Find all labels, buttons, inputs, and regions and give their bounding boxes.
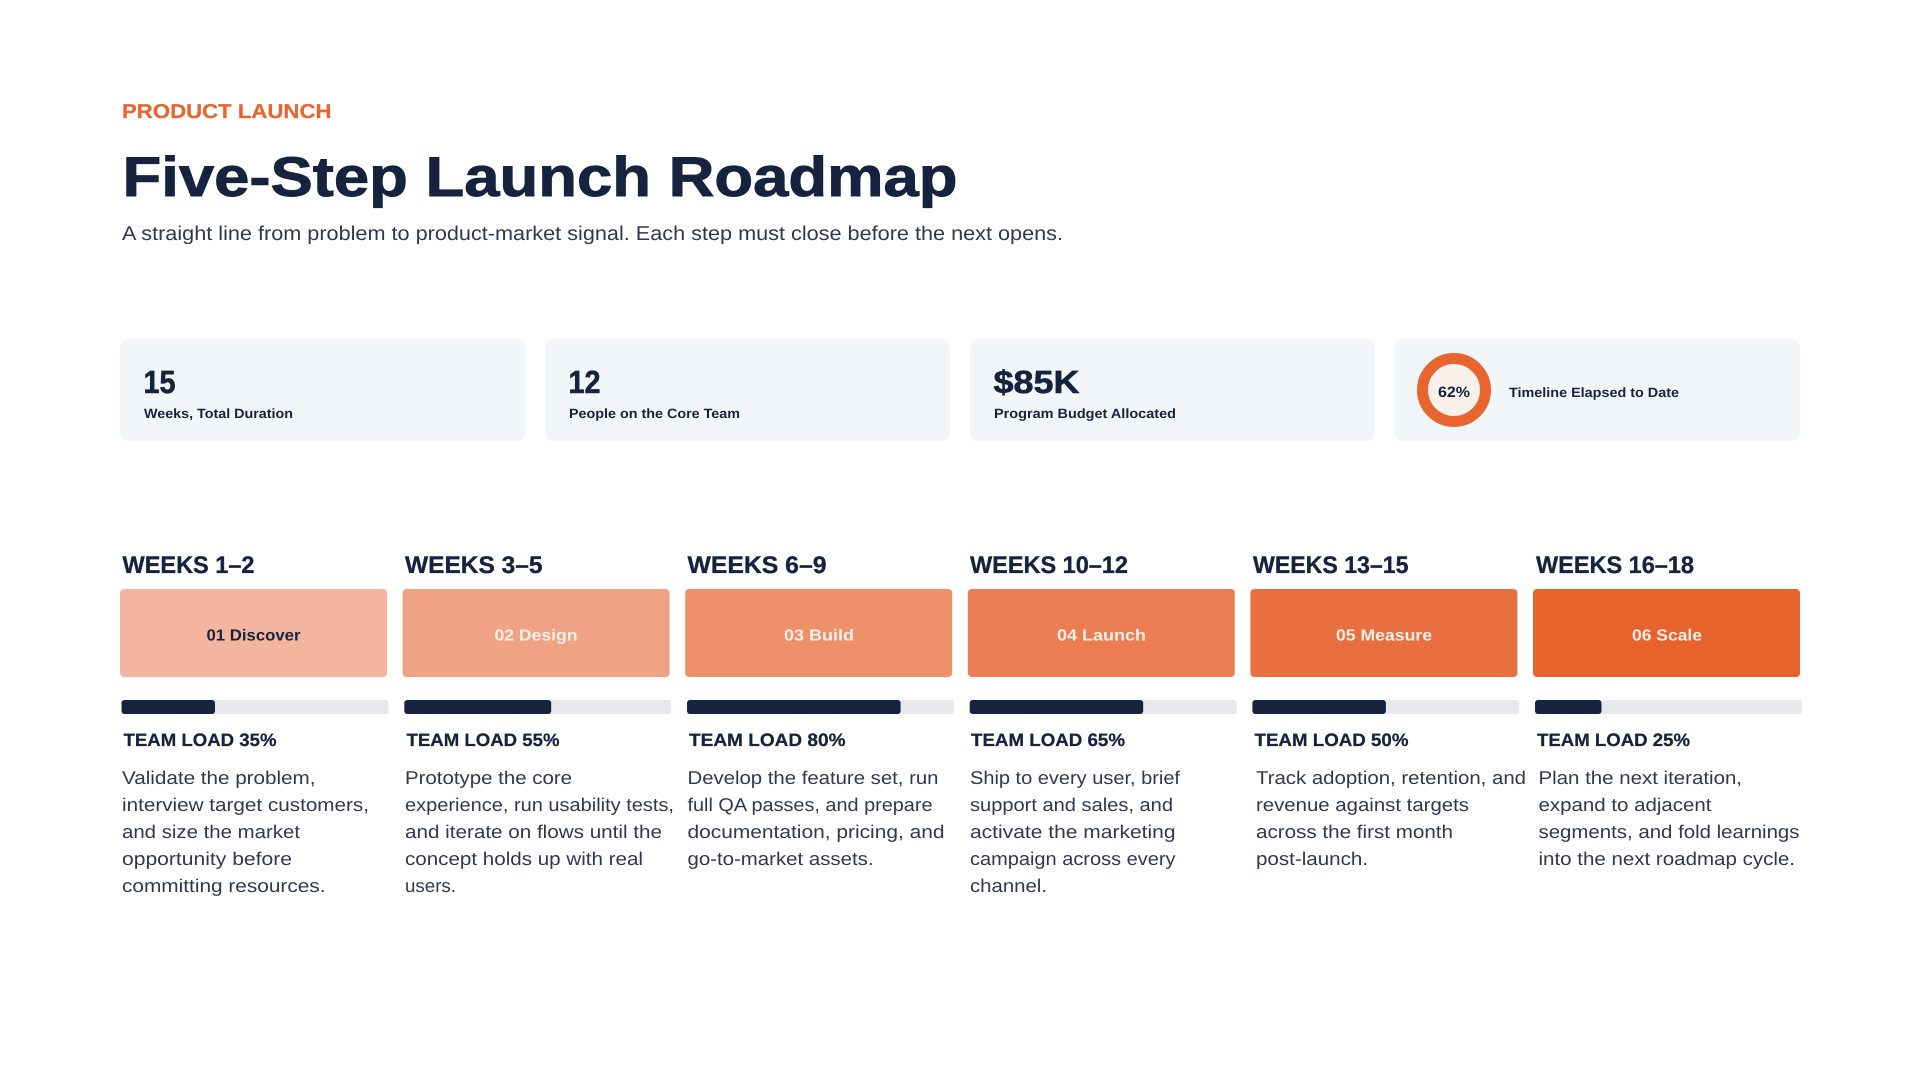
panel: step 05 measure (1250, 552, 1526, 869)
donut gauge: 62%: 62% (1438, 384, 1470, 401)
panel: step 02 design: TEAM LOAD 55% (406, 730, 560, 750)
description: revenue against targets (1256, 794, 1469, 815)
description: segments, and fold learnings (1538, 821, 1800, 842)
description: campaign across every (970, 848, 1176, 869)
stat card: 12 people: People on the Core Team (569, 406, 740, 421)
description: interview target customers, (122, 794, 369, 815)
eyebrow: product launch: PRODUCT LAUNCH (122, 101, 332, 123)
step box: 01 Discover: 01 Discover (206, 628, 300, 644)
description: documentation, pricing, and (688, 821, 944, 842)
stat card: 12 people: 12 (568, 364, 600, 400)
description (970, 767, 1181, 896)
step box: 02 Design: 02 Design (494, 628, 578, 644)
panel: stat cards (120, 339, 1800, 441)
panel: step 03 build (685, 552, 954, 869)
stat card: 15 weeks (120, 339, 525, 441)
panel: step 04 launch: TEAM LOAD 65% (971, 730, 1125, 750)
description: committing resources. (122, 875, 326, 896)
stat card: 15 weeks: 15 (144, 364, 176, 400)
panel: step 01 discover (120, 552, 388, 896)
progress bar: 25% (1535, 700, 1802, 714)
description: and size the market (122, 821, 300, 842)
description: across the first month (1256, 821, 1453, 842)
description: users. (405, 875, 456, 896)
stat card: 12 people (545, 339, 950, 441)
step box: 04 Launch: 04 Launch (1057, 628, 1146, 644)
step box: 05 Measure (1250, 589, 1517, 677)
description: Prototype the core (405, 767, 572, 788)
panel: step 04 launch: WEEKS 10–12 (970, 552, 1128, 579)
description: support and sales, and (970, 794, 1173, 815)
description: Validate the problem, (122, 767, 316, 788)
gauge label: Timeline Elapsed to Date (1509, 385, 1680, 400)
donut gauge: 62% (1422, 358, 1486, 422)
description: concept holds up with real (405, 848, 643, 869)
description: full QA passes, and prepare (688, 794, 932, 815)
title: Five-Step Launch Roadmap (122, 145, 957, 208)
stat card: 15 weeks: Weeks, Total Duration (144, 406, 293, 421)
description: go-to-market assets. (688, 848, 874, 869)
description: into the next roadmap cycle. (1538, 848, 1795, 869)
step box: 04 Launch (968, 589, 1235, 677)
description: and iterate on flows until the (405, 821, 662, 842)
panel: step 03 build: WEEKS 6–9 (688, 552, 826, 579)
description: Plan the next iteration, (1538, 767, 1742, 788)
description (122, 767, 369, 896)
step box: 03 Build (685, 589, 952, 677)
progress bar: 65% (970, 700, 1237, 714)
subtitle: A straight line from problem to product-market signal. Each step must close before the next opens. (122, 223, 1063, 245)
description (1538, 767, 1800, 869)
description (1256, 767, 1526, 869)
step box: 03 Build: 03 Build (784, 628, 854, 644)
description: channel. (970, 875, 1047, 896)
description: opportunity before (122, 848, 292, 869)
stat card: timeline elapsed (1395, 339, 1800, 441)
panel: step 06 scale (1533, 552, 1802, 869)
panel: step 05 measure: TEAM LOAD 50% (1254, 730, 1408, 750)
progress bar: 55% (404, 700, 671, 714)
panel: step 03 build: TEAM LOAD 80% (689, 730, 846, 750)
description: Ship to every user, brief (970, 767, 1181, 788)
panel: step 01 discover: TEAM LOAD 35% (124, 730, 276, 750)
panel: step 06 scale: WEEKS 16–18 (1536, 552, 1694, 579)
panel: step 01 discover: WEEKS 1–2 (122, 552, 254, 579)
step box: 01 Discover (120, 589, 387, 677)
description (405, 767, 674, 896)
stat card: budget: Program Budget Allocated (994, 406, 1176, 421)
description: experience, run usability tests, (405, 794, 674, 815)
description: activate the marketing (970, 821, 1176, 842)
stat card: budget: $85K (994, 364, 1080, 400)
step box: 06 Scale (1533, 589, 1800, 677)
description: Track adoption, retention, and (1256, 767, 1526, 788)
panel: step 02 design (403, 552, 674, 896)
progress bar: 35% (122, 700, 388, 714)
panel: step 02 design: WEEKS 3–5 (405, 552, 542, 579)
progress bar: 50% (1252, 700, 1519, 714)
step box: 06 Scale: 06 Scale (1632, 628, 1702, 644)
stat card: budget (970, 339, 1375, 441)
description: post-launch. (1256, 848, 1368, 869)
panel: step 06 scale: TEAM LOAD 25% (1537, 730, 1690, 750)
description: Develop the feature set, run (688, 767, 938, 788)
description: expand to adjacent (1538, 794, 1712, 815)
panel: step 04 launch (968, 552, 1237, 896)
panel: step 05 measure: WEEKS 13–15 (1253, 552, 1408, 579)
step box: 02 Design (403, 589, 670, 677)
description (688, 767, 944, 869)
step box: 05 Measure: 05 Measure (1336, 628, 1432, 644)
progress bar: 80% (687, 700, 954, 714)
